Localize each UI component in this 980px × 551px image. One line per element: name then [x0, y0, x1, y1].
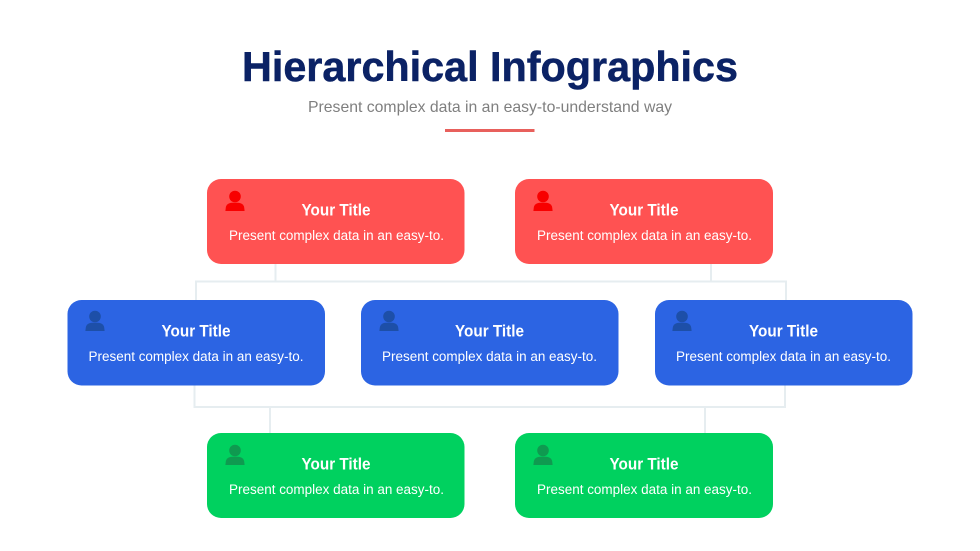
panel: red card left — [207, 179, 464, 264]
panel: blue card centre — [361, 300, 618, 386]
icon: red person right — [533, 191, 553, 211]
text: red card right: Present complex data in an easy-to. — [537, 228, 752, 243]
icon: blue person centre — [379, 311, 399, 331]
heading: blue card centre: Your Title — [455, 322, 524, 340]
icon: blue person right — [672, 311, 692, 331]
heading: red card right: Your Title — [610, 200, 678, 220]
subtitle: Present complex data in an easy-to-understand way — [308, 99, 672, 116]
heading: red card left: Your Title — [302, 200, 370, 220]
heading: green card left: Your Title — [302, 454, 370, 474]
text: blue card centre: Present complex data in an easy-to. — [382, 349, 597, 364]
title: Hierarchical Infographics — [242, 43, 738, 90]
text: blue card left: Present complex data in an easy-to. — [88, 349, 304, 364]
heading: blue card left: Your Title — [162, 322, 230, 340]
text: red card left: Present complex data in an easy-to. — [229, 228, 444, 243]
icon: green person left — [225, 445, 245, 465]
panel: green card left — [207, 433, 464, 518]
icon: red person left — [225, 191, 245, 211]
text: green card right: Present complex data in an easy-to. — [537, 482, 752, 497]
heading: green card right: Your Title — [610, 454, 678, 474]
panel: red card right — [515, 179, 773, 264]
text: green card left: Present complex data in an easy-to. — [229, 482, 444, 497]
panel: blue card right — [655, 300, 912, 386]
heading: blue card right: Your Title — [749, 322, 818, 340]
panel: green card right — [515, 433, 773, 518]
icon: green person right — [533, 445, 553, 465]
panel: blue card left — [68, 300, 325, 386]
upper connector lines — [196, 264, 786, 300]
text: blue card right: Present complex data in an easy-to. — [676, 349, 891, 364]
title accent underline — [445, 129, 534, 132]
lower connector lines — [194, 385, 785, 433]
icon: blue person left — [85, 311, 105, 331]
